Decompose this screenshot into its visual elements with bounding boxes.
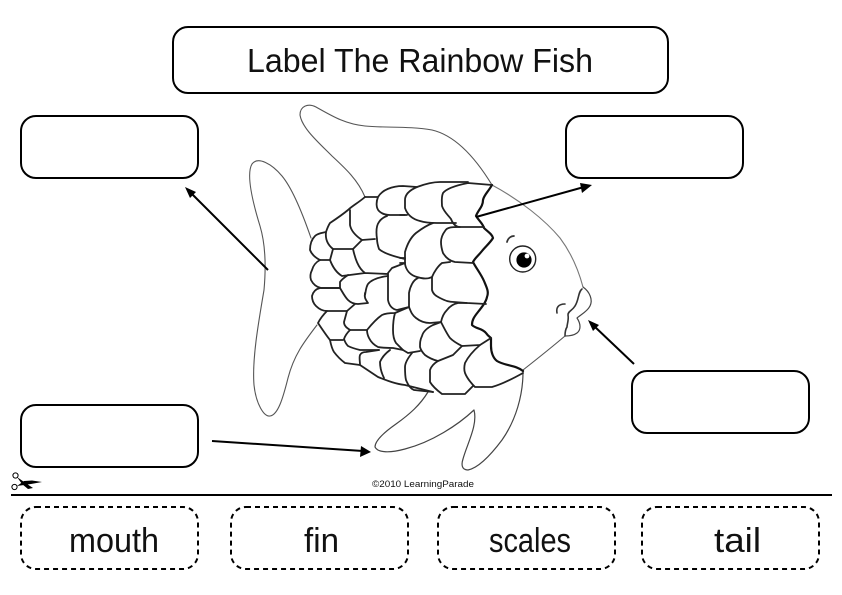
word card: tail: tail [714, 522, 761, 560]
arrow: to fin label [212, 441, 371, 457]
arrow: to mouth label [588, 320, 634, 364]
eye [510, 246, 536, 272]
title [173, 27, 668, 93]
lips [565, 287, 591, 336]
top row scales [400, 182, 468, 223]
lower scales [318, 311, 343, 340]
word card: fin [231, 507, 408, 569]
word card: tail [642, 507, 819, 569]
title: Label The Rainbow Fish [247, 42, 593, 79]
eyebrow [507, 236, 514, 242]
word card: mouth: mouth [69, 522, 159, 560]
scale edge at head [472, 185, 523, 371]
belly scales [420, 322, 462, 361]
empty label box: right [632, 371, 809, 433]
empty label box: bottom left [21, 405, 198, 467]
icon: scissors [12, 473, 42, 490]
nostril [557, 304, 565, 313]
word card: mouth [21, 507, 198, 569]
scales [310, 182, 523, 394]
rainbow fish illustration [250, 105, 591, 470]
word card: scales [438, 507, 615, 569]
word card: scales: scales [489, 522, 571, 560]
word card: fin: fin [304, 522, 339, 560]
lower jaw outline [523, 336, 565, 370]
empty label box: top left [21, 116, 198, 178]
arrow: to tail label [185, 187, 268, 270]
upper back scales [310, 197, 365, 260]
dorsal fin outline [300, 105, 492, 197]
middle scales [310, 260, 348, 288]
head outline [492, 185, 583, 287]
cut line [11, 494, 832, 496]
bottom fin outline [375, 372, 523, 470]
empty label box: top right [566, 116, 743, 178]
tail outline [250, 161, 317, 416]
arrow: to scales label [476, 183, 592, 217]
copyright: ©2010 LearningParade [372, 479, 474, 489]
